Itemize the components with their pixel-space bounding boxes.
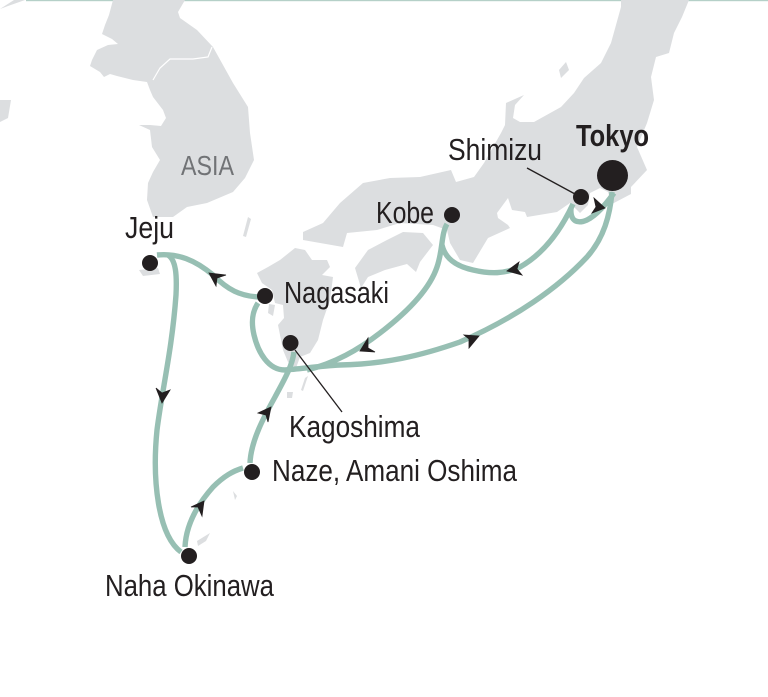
- marker: Shimizu: [573, 189, 589, 205]
- arrow: Kobe leg: [507, 262, 522, 275]
- label: Naha Okinawa: Naha Okinawa: [105, 568, 275, 603]
- arrow: Naha to Naze: [191, 501, 204, 516]
- land: Shikoku: [355, 232, 433, 288]
- arrow: Nagasaki to Jeju: [209, 273, 226, 286]
- route: Kagoshima to Kobe: [307, 224, 447, 370]
- label: Tokyo: Tokyo: [576, 118, 649, 153]
- label: Kobe: Kobe: [376, 195, 434, 230]
- route: Shimizu to Tokyo: [571, 193, 614, 222]
- land: top left fragment: [0, 0, 25, 9]
- land: Tsushima island: [243, 217, 251, 237]
- land: Jeju island: [139, 268, 160, 276]
- leader line: Kagoshima: [295, 350, 342, 412]
- route: Naze to Kagoshima: [250, 352, 294, 463]
- label: Nagasaki: Nagasaki: [284, 275, 389, 310]
- land: Kyushu: [257, 248, 333, 368]
- route: Naha to Naze: [185, 468, 243, 547]
- land: Tanegashima island: [301, 376, 308, 391]
- land: Yakushima island: [287, 392, 293, 398]
- land: Korea: [90, 0, 254, 217]
- marker: Jeju: [142, 255, 158, 271]
- arrow: Kagoshima to Kobe leg: [360, 338, 375, 352]
- land masses: [0, 0, 689, 546]
- label: Naze, Amani Oshima: Naze, Amani Oshima: [272, 453, 518, 488]
- route lines: [155, 192, 614, 552]
- arrow: Naze to Kagoshima: [258, 407, 271, 422]
- land: left fragment: [0, 100, 11, 122]
- land: Sado island: [559, 62, 569, 78]
- land: Tokunoshima island: [233, 491, 237, 500]
- route: Jeju to Naha: [155, 255, 181, 552]
- route arrows: [156, 198, 605, 516]
- land: Honshu: [303, 0, 689, 263]
- label: Jeju: Jeju: [125, 210, 174, 245]
- route: Nagasaki to Jeju: [157, 255, 259, 297]
- marker: Kagoshima: [282, 335, 298, 351]
- land: Okinawa island: [197, 533, 210, 546]
- leader line: Shimizu: [527, 168, 575, 194]
- arrow: Jeju to Naha: [156, 388, 170, 403]
- marker: Kobe: [444, 207, 460, 223]
- marker: Tokyo: [597, 160, 628, 191]
- arrow: east leg: [464, 335, 479, 348]
- label: Shimizu: Shimizu: [448, 132, 542, 167]
- label: ASIA: ASIA: [181, 150, 234, 181]
- marker: Naze: [244, 464, 260, 480]
- arrow: Shimizu leg: [592, 198, 605, 213]
- marker: Naha: [181, 548, 197, 564]
- route: Tokyo to Nagasaki: [252, 192, 612, 370]
- Korea border: [153, 47, 212, 80]
- label: Kagoshima: Kagoshima: [289, 409, 421, 444]
- marker: Nagasaki: [257, 288, 273, 304]
- land: Goto island: [268, 304, 275, 316]
- route: Kobe to Shimizu: [442, 204, 573, 273]
- port markers: [142, 160, 628, 564]
